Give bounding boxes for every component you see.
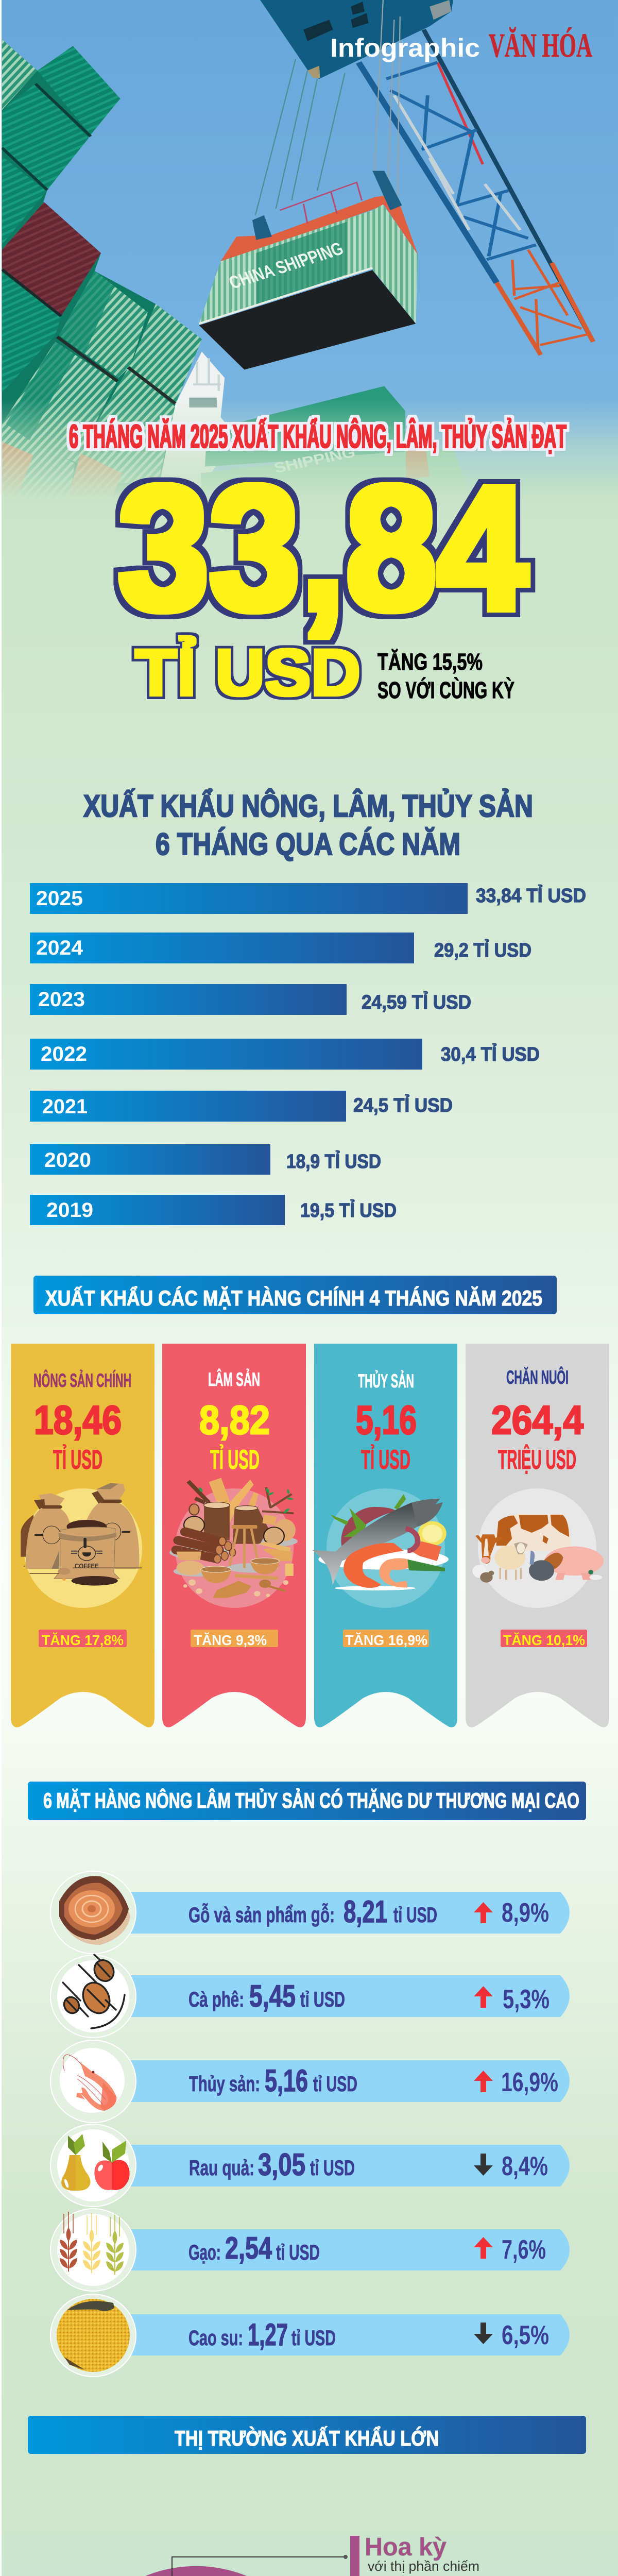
panel: fishery products: TỈ USD: [361, 1444, 410, 1475]
bar 2021: [30, 1091, 453, 1122]
big number: 33,84: [118, 449, 529, 647]
icon: coffee sacks: [21, 1483, 142, 1586]
callout: United States: với thị phần chiếm: [368, 2558, 479, 2574]
bar 2019: 19,5 TỈ USD: [300, 1199, 397, 1222]
back stack of containers: [201, 386, 466, 489]
row: rubber: [50, 2294, 570, 2377]
spreader frame: [221, 194, 418, 261]
arrow up: [474, 1902, 493, 1923]
bar 2021: 24,5 TỈ USD: [353, 1094, 453, 1116]
lifted China Shipping container: CHINA SHIPPING: [226, 239, 347, 293]
row: seafood: [50, 2040, 570, 2123]
panel: livestock products: 264,4: [491, 1397, 583, 1443]
big unit: TỈ USD: [135, 636, 360, 709]
bar 2022: [30, 1039, 540, 1070]
panel: forest products: TỈ USD: [210, 1444, 260, 1475]
row: seafood: Thủy sản:: [189, 2072, 260, 2096]
pie chart: market share: [62, 2566, 331, 2576]
bar 2020: 18,9 TỈ USD: [286, 1150, 381, 1173]
bar 2019: [30, 1195, 397, 1225]
icon: shrimp: [63, 2055, 116, 2111]
bar 2021: 2021: [42, 1095, 88, 1118]
row: rubber: 6,5%: [502, 2320, 549, 2350]
row: coffee: [50, 1955, 570, 2038]
bar 2024: 2024: [36, 937, 83, 959]
row: seafood: 5,16: [265, 2063, 308, 2098]
row: coffee: 5,3%: [503, 1985, 550, 2014]
row: fruit and vegetables: Rau quả:: [189, 2156, 254, 2180]
arrow down: [474, 2154, 493, 2176]
section header: export markets: [28, 2416, 586, 2454]
bar 2020: 2020: [44, 1149, 91, 1172]
top logo: Infographic: [330, 33, 480, 62]
growth note: TĂNG 15,5%: [377, 649, 483, 675]
crane boom: [358, 29, 593, 355]
row: rice: [50, 2209, 570, 2291]
bar 2023: 2023: [38, 988, 85, 1011]
top logo: [330, 27, 592, 64]
growth note: [377, 649, 514, 703]
left page margin: [0, 0, 2, 2576]
icon: seafood: [312, 1494, 449, 1590]
hero photo: container crane at port: [0, 0, 618, 513]
icon: raw rubber: [57, 2299, 130, 2372]
panel: fishery products: THỦY SẢN: [358, 1370, 414, 1392]
bar 2024: [30, 933, 531, 963]
row: seafood: tỉ USD: [313, 2072, 357, 2096]
container stacks on the left: [2, 39, 202, 492]
row: fruit and vegetables: 8,4%: [502, 2151, 548, 2181]
row: coffee: 5,45: [249, 1979, 296, 2013]
panel: forest products: 8,82: [199, 1397, 270, 1443]
row: seafood: 16,9%: [501, 2067, 558, 2097]
chart heading: [83, 789, 533, 861]
row: rice: 7,6%: [502, 2235, 546, 2265]
row: rice: Gạo:: [188, 2240, 221, 2264]
row: rubber: 1,27: [248, 2317, 288, 2352]
growth note: SO VỚI CÙNG KỲ: [377, 677, 514, 703]
chart heading: 6 THÁNG QUA CÁC NĂM: [156, 827, 460, 861]
bar 2019: 2019: [46, 1199, 93, 1222]
panel: fishery products: 5,16: [356, 1397, 417, 1443]
panel: livestock products: CHĂN NUÔI: [506, 1366, 569, 1388]
icon: rice stalks: [60, 2212, 124, 2275]
badge: TĂNG 10,1%: [503, 1632, 585, 1648]
row: wood: 8,9%: [502, 1898, 549, 1928]
row: fruit and vegetables: [50, 2124, 570, 2207]
hero fade into background: [0, 399, 618, 502]
row: fruit and vegetables: tỉ USD: [310, 2156, 355, 2180]
icon: timber and wooden goods: [169, 1478, 298, 1598]
panel: main agricultural products: 18,46: [34, 1397, 122, 1443]
crane machinery block: [260, 0, 453, 79]
row: rice: 2,54: [225, 2231, 272, 2265]
section header: main commodities: [33, 1276, 557, 1314]
icon: pear and apple: [61, 2134, 130, 2191]
badge: TĂNG 16,9%: [345, 1632, 427, 1648]
row: wood: 8,21: [344, 1894, 387, 1929]
panel: fishery products: [312, 1344, 457, 1727]
bar 2024: 29,2 TỈ USD: [434, 939, 531, 961]
bar 2025: 2025: [36, 887, 83, 910]
bar 2022: 2022: [41, 1043, 87, 1065]
row: wood: tỉ USD: [393, 1903, 437, 1927]
bar 2023: 24,59 TỈ USD: [362, 991, 471, 1013]
badge: TĂNG 17,8%: [42, 1632, 124, 1648]
bar 2025: [30, 883, 586, 914]
bar 2023: [30, 984, 471, 1015]
panel: main agricultural products: COFFEE: [75, 1562, 99, 1570]
bar 2020: [30, 1144, 381, 1175]
container side: [199, 210, 372, 324]
row: rice: tỉ USD: [276, 2240, 320, 2264]
arrow up: [474, 2071, 493, 2092]
row: coffee: tỉ USD: [300, 1987, 345, 2011]
section header: main commodities: XUẤT KHẨU CÁC MẶT HÀNG CHÍNH 4 THÁNG NĂM 2025: [45, 1285, 542, 1310]
panel: forest products: LÂM SẢN: [208, 1368, 260, 1390]
sky: [0, 0, 618, 513]
arrow down: [474, 2323, 493, 2344]
badge: TĂNG 9,3%: [194, 1632, 267, 1648]
panel: main agricultural products: TỈ USD: [53, 1444, 102, 1475]
row: wood: [50, 1871, 570, 1954]
bar chart: exports by year: [30, 883, 586, 1225]
callout: United States: [170, 2533, 479, 2576]
container end: [372, 205, 418, 324]
row: wood: Gỗ và sản phẩm gỗ:: [188, 1902, 335, 1927]
ship superstructure: [161, 351, 225, 488]
chart heading: XUẤT KHẨU NÔNG, LÂM, THỦY SẢN: [83, 789, 533, 823]
lifted China Shipping container: [199, 171, 418, 370]
arrow up: [474, 1986, 493, 2008]
crane cables: [255, 0, 400, 215]
bar 2022: 30,4 TỈ USD: [441, 1043, 540, 1065]
panel: main agricultural products: NÔNG SẢN CHÍNH: [33, 1369, 131, 1391]
row: coffee: Cà phê:: [188, 1987, 244, 2011]
callout: United States: Hoa kỳ: [365, 2533, 447, 2561]
panel: main agricultural products: [11, 1344, 154, 1727]
icon: farm animals: [472, 1514, 604, 1583]
row: fruit and vegetables: 3,05: [258, 2147, 305, 2182]
icon: log cross-section: [59, 1876, 130, 1945]
row: rubber: tỉ USD: [291, 2326, 336, 2350]
container underside: [199, 270, 416, 370]
section header: export markets: THỊ TRƯỜNG XUẤT KHẨU LỚN: [175, 2426, 439, 2450]
bar 2025: 33,84 TỈ USD: [476, 884, 586, 907]
panel: forest products: [162, 1344, 306, 1727]
section header: six surplus commodities: [28, 1782, 586, 1820]
back stack of containers: SHIPPING: [272, 444, 357, 477]
icon: coffee beans: [61, 1955, 125, 2028]
panel: livestock products: [466, 1344, 609, 1727]
row: rubber: Cao su:: [188, 2326, 243, 2350]
arrow up: [474, 2237, 493, 2259]
